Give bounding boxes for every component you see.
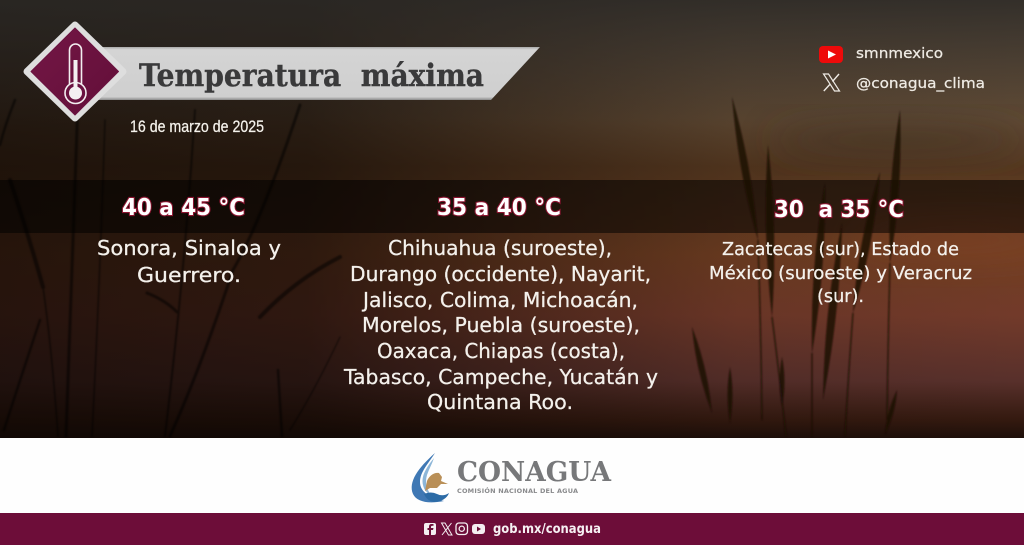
icon: youtube bbox=[472, 524, 485, 534]
footer url: gob.mx/conagua bbox=[493, 522, 601, 537]
icon: instagram bbox=[456, 523, 468, 534]
states: Zacatecas (sur), Estado de bbox=[722, 239, 959, 260]
icon: youtube bbox=[819, 46, 843, 63]
social accounts bbox=[819, 46, 985, 92]
icon: water and eagle bbox=[412, 453, 449, 502]
states: Jalisco, Colima, Michoacán, bbox=[361, 288, 638, 312]
x handle: @conagua_clima bbox=[856, 76, 985, 92]
icon: facebook bbox=[424, 523, 436, 535]
icon: x bbox=[442, 523, 452, 535]
youtube handle: smnmexico bbox=[856, 46, 943, 62]
states: Oaxaca, Chiapas (costa), bbox=[377, 339, 625, 363]
range heading: 30 a 35 °C bbox=[774, 195, 904, 223]
range heading: 40 a 45 °C bbox=[122, 193, 245, 221]
column: 35 a 40 bbox=[343, 193, 664, 414]
wordmark: CONAGUA bbox=[457, 457, 612, 488]
date: 16 de marzo de 2025 bbox=[130, 117, 264, 136]
states: Guerrero. bbox=[137, 263, 241, 287]
conagua logo bbox=[412, 453, 612, 502]
states: Tabasco, Campeche, Yucatán y bbox=[343, 365, 658, 389]
bottom white logo strip bbox=[0, 438, 1024, 513]
states: (sur). bbox=[817, 286, 864, 307]
agency name: COMISIÓN NACIONAL DEL AGUA bbox=[457, 486, 578, 495]
range heading: 35 a 40 °C bbox=[437, 193, 561, 221]
maroon footer bar bbox=[0, 513, 1024, 545]
footer social links bbox=[424, 522, 601, 537]
states: Sonora, Sinaloa y bbox=[97, 236, 281, 260]
column: 40 a 45 bbox=[97, 193, 287, 287]
states: Durango (occidente), Nayarit, bbox=[350, 262, 651, 286]
states: México (suroeste) y Veracruz bbox=[709, 263, 972, 284]
dark heading band bbox=[0, 180, 1024, 233]
states: Morelos, Puebla (suroeste), bbox=[362, 313, 640, 337]
silhouetted grass bbox=[0, 97, 901, 436]
title: Temperatura máxima bbox=[139, 58, 484, 94]
states: Chihuahua (suroeste), bbox=[388, 236, 612, 260]
icon: thermometer diamond bbox=[27, 25, 123, 118]
title banner bbox=[95, 47, 540, 100]
states: Quintana Roo. bbox=[427, 390, 573, 414]
icon: x bbox=[824, 74, 840, 91]
column: 30 a 35 bbox=[709, 195, 978, 307]
